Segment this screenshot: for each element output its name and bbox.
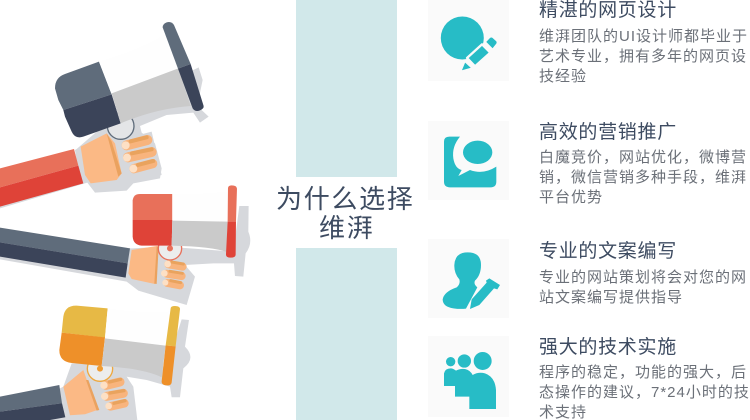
trigger ring (158, 237, 182, 260)
center title: 维湃 (319, 213, 374, 243)
feature 1: description: 技经验 (539, 68, 587, 85)
feature 3: description: 站文案编写提供指导 (539, 288, 683, 306)
feature 4: heading: 强大的技术实施 (539, 336, 677, 358)
center panel: lower strip (296, 248, 397, 420)
sleeve (0, 385, 62, 412)
shadow (0, 67, 209, 208)
body (62, 306, 108, 338)
feature 4: description: 态操作的建议，7*24小时的技 (539, 384, 750, 401)
body (55, 62, 112, 110)
center title: 为什么选择 (276, 184, 415, 214)
feature 3: icon tile with person and pen (428, 239, 509, 318)
rim (163, 22, 191, 69)
feature 4: description: 程序的稳定，功能的强大，后 (539, 364, 747, 381)
fingers (100, 379, 125, 409)
center title (276, 184, 415, 243)
feature 2: description: 白魔竞价，网站优化，微博营 (539, 148, 747, 166)
feature 3: description: 专业的网站策划将会对您的网 (539, 269, 747, 286)
feature 2: heading: 高效的营销推广 (539, 121, 677, 143)
body (133, 194, 172, 220)
feature 4: icon tile with group of people (428, 336, 509, 417)
feature 4: description (539, 364, 750, 420)
trigger ring (107, 113, 134, 139)
hand (81, 133, 122, 183)
center panel: upper strip (296, 0, 397, 177)
fingers (161, 261, 183, 286)
sleeve (0, 228, 130, 263)
feature 2: description: 平台优势 (539, 189, 603, 206)
feature 1: description (539, 28, 748, 85)
shadow (0, 206, 250, 305)
feature 3: heading: 专业的文案编写 (539, 240, 677, 262)
feature 1: heading: 精湛的网页设计 (539, 0, 677, 21)
megaphone illustration: middle, coral (0, 185, 250, 305)
megaphone illustration: top, red sleeve (0, 22, 209, 208)
feature 1: description: 艺术专业，拥有多年的网页设 (539, 48, 747, 65)
hand (128, 246, 157, 284)
shadow (0, 319, 190, 420)
trigger ring (87, 356, 113, 381)
rim (228, 185, 237, 222)
feature 2: icon tile with chat bubble (428, 121, 509, 200)
rim (166, 306, 180, 346)
hand (63, 370, 97, 415)
sleeve (0, 149, 78, 187)
megaphone illustration: bottom, yellow (0, 306, 190, 420)
feature 2: description: 销，微信营销多种手段，维湃 (539, 169, 747, 186)
feature 1: description: 维湃团队的UI设计师都毕业于 (539, 28, 748, 45)
feature 1: icon tile with speech circle and pencil (428, 0, 509, 81)
feature 3: description (539, 269, 747, 306)
feature 2: description (539, 148, 747, 206)
fingers (122, 137, 153, 173)
